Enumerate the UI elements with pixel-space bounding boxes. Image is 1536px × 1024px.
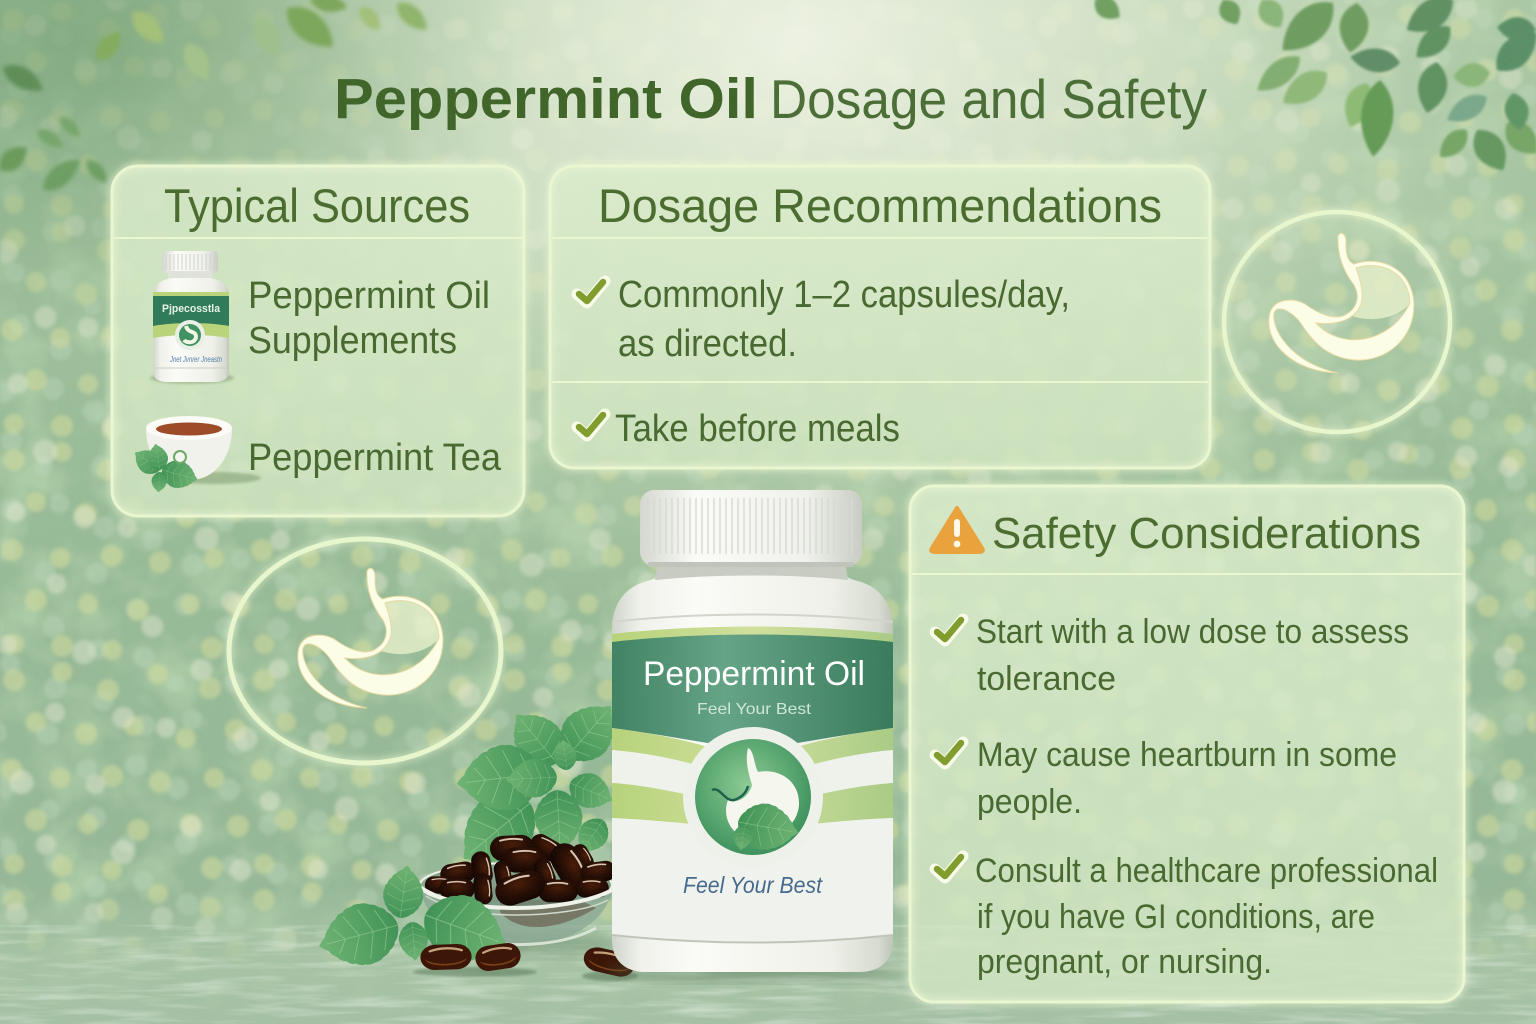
- bottle cap: [640, 490, 862, 567]
- check: daily capsules: [577, 281, 605, 303]
- icon: stomach circle left: [229, 539, 501, 763]
- label text: product name: Peppermint Oil: [643, 655, 865, 693]
- label emblem: stomach and leaf: [683, 727, 823, 867]
- icon: mini supplement bottle: Pjpecosstla: [162, 303, 221, 315]
- icon: warning triangle: [931, 508, 983, 552]
- check: low dose: [935, 619, 963, 641]
- text: daily capsules: Commonly 1–2 capsules/day,: [618, 274, 1070, 316]
- text: heartburn: people.: [977, 783, 1082, 821]
- bottle body: [612, 565, 893, 972]
- label: peppermint oil supplements: Supplements: [248, 320, 457, 362]
- title: Dosage and Safety: [770, 68, 1207, 130]
- icon: mini supplement bottle: Jnet Jvnrer Jneastn: [169, 355, 222, 364]
- icon: stomach circle right: [1224, 212, 1450, 432]
- panel: dosage recommendations: [550, 166, 1210, 468]
- text: before meals: Take before meals: [615, 408, 900, 450]
- text: low dose: Start with a low dose to assess: [976, 613, 1409, 651]
- glass bowl of capsules: [415, 830, 617, 955]
- loose capsules: [413, 941, 638, 981]
- text: heartburn: May cause heartburn in some: [977, 736, 1397, 774]
- panel: safety considerations: [910, 486, 1464, 1002]
- label text: tagline: Feel Your Best: [697, 701, 812, 718]
- heading: typical sources: Typical Sources: [164, 179, 470, 232]
- label: peppermint oil supplements: Peppermint Oil: [248, 275, 490, 317]
- mint plant behind bowl: [442, 689, 630, 884]
- icon: mini supplement bottle: [150, 251, 234, 384]
- text: consult: Consult a healthcare professional: [975, 852, 1438, 890]
- supplement bottle: [605, 490, 905, 980]
- label: green band: [612, 626, 893, 942]
- mint leaves foreground: [311, 863, 518, 976]
- label: peppermint tea: Peppermint Tea: [248, 437, 502, 479]
- icon: tea cup with mint: [128, 416, 261, 493]
- check: heartburn: [935, 742, 963, 764]
- label: peppermint oil supplements: [248, 275, 490, 362]
- foliage: top left: [0, 0, 433, 198]
- text: consult: pregnant, or nursing.: [977, 943, 1272, 981]
- heading: dosage recommendations: Dosage Recommendations: [598, 179, 1162, 232]
- title: [334, 67, 1207, 131]
- text: consult: if you have GI conditions, are: [977, 898, 1375, 936]
- text: daily capsules: as directed.: [618, 323, 797, 365]
- text: low dose: tolerance: [977, 660, 1116, 698]
- panel: typical sources: [112, 166, 524, 516]
- text: consult: [975, 852, 1438, 981]
- check: before meals: [577, 414, 605, 436]
- text: daily capsules: [618, 274, 1070, 365]
- text: low dose: [976, 613, 1409, 698]
- title: Peppermint Oil: [334, 67, 758, 131]
- check: consult: [935, 856, 963, 878]
- label text: script tagline: Feel Your Best: [683, 872, 823, 898]
- text: heartburn: [977, 736, 1397, 821]
- heading: safety considerations: Safety Considerations: [992, 509, 1421, 558]
- foliage: top right: [1089, 0, 1536, 178]
